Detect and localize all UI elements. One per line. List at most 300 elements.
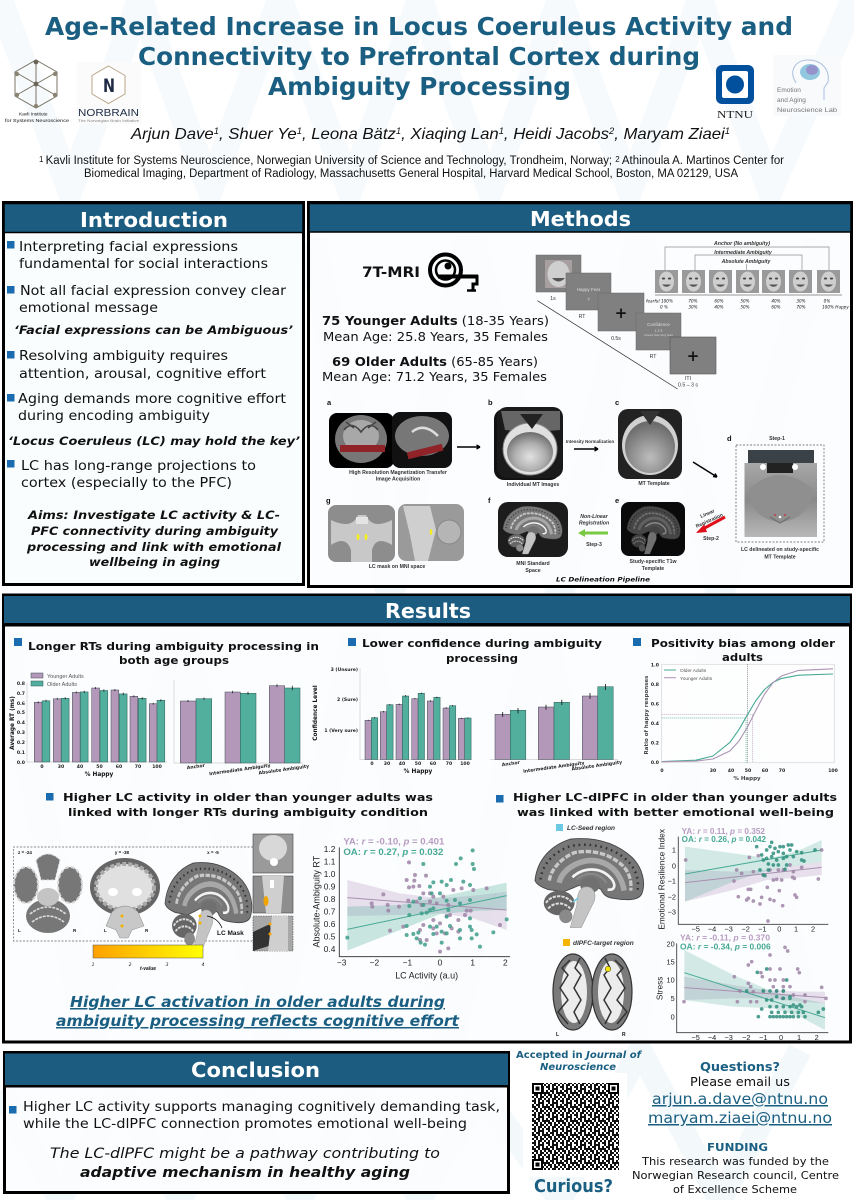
bullet list: introduction points	[7, 240, 301, 491]
authors: , Xiaqing Lan	[401, 126, 499, 143]
task timeline: Happy Fear	[577, 287, 601, 292]
bullet list: introduction points: ‘Facial expressions can be Ambiguous’	[14, 323, 294, 337]
bar chart: average RT by percent happy: 60	[116, 764, 122, 770]
funding block: Norwegian Research council, Centre	[632, 1169, 839, 1182]
ambiguity conditions with face morphs: 70%	[796, 304, 806, 310]
bar chart: confidence by percent happy: 1 (Very sure)	[324, 728, 358, 734]
pipeline step c: MT Template	[638, 481, 670, 487]
bar chart: confidence by percent happy	[313, 667, 472, 775]
bar chart: average RT by percent happy: 0	[40, 764, 44, 770]
takeaway: cognitive effort: Higher LC activation in older adults during	[70, 993, 445, 1011]
subheading: lower confidence: processing	[446, 652, 518, 665]
funding block: This research was funded by the	[641, 1155, 829, 1168]
bar chart: confidence by percent happy: 50	[415, 761, 421, 767]
bullet list: introduction points: Not all facial expression convey clear	[20, 284, 287, 299]
scatter plot: LC-dlPFC vs emotional resilience: −4	[708, 925, 716, 934]
takeaway: cognitive effort: ambiguity processing reflects cognitive effort	[56, 1012, 460, 1030]
line chart: ratio of happy responses: 0.8	[651, 682, 659, 688]
scatter plot: LC-dlPFC vs emotional resilience: 1	[672, 846, 676, 855]
authors: , Heidi Jacobs	[504, 126, 609, 143]
task timeline	[536, 255, 716, 389]
participants: younger and older adults: 69 Older Adults (65-85 Years)	[332, 355, 538, 369]
bar chart: confidence by percent happy: 3 (Unsure)	[331, 667, 358, 673]
colour bar: t-value	[92, 945, 205, 972]
Curious label: Curious?	[534, 1176, 613, 1197]
bullet list: introduction points: Aging demands more cognitive effort	[18, 392, 286, 407]
panel: conclusion	[4, 1052, 508, 1192]
pipeline step d	[727, 434, 824, 560]
conclusion statement: The LC-dlPFC might be a pathway contributing to	[50, 1146, 440, 1162]
task timeline: +	[615, 304, 627, 322]
logo: Emotion and Aging Neuroscience Lab	[773, 55, 841, 116]
scatter plot: LC-dlPFC vs stress: 0	[671, 1012, 675, 1021]
bar chart: average RT by percent happy: 0.7	[17, 691, 25, 697]
arrow: non-linear registration step 3	[578, 514, 609, 548]
pipeline step b: b	[488, 398, 493, 407]
authors: 1	[214, 126, 219, 136]
bullet list: introduction points: fundamental for social interactions	[19, 257, 268, 272]
scatter plot: LC-dlPFC vs stress: −4	[708, 1033, 716, 1042]
pipeline step f: Space	[525, 568, 541, 574]
subheading: lower confidence	[348, 637, 602, 665]
task timeline: ITI	[685, 376, 691, 382]
conclusion statement: adaptive mechanism in healthy aging	[80, 1165, 410, 1181]
line chart: ratio of happy responses: 0.4	[651, 721, 659, 727]
scatter plot: LC-dlPFC vs stress: OA: r = -0.34, p = 0.006	[680, 941, 771, 951]
bar chart: average RT by ambiguity: Intermediate Ambiguity	[209, 763, 271, 777]
subheading: LC-dlPFC: was linked with better emotional well-being	[517, 806, 834, 819]
pipeline step d: d	[727, 434, 732, 443]
panel: methods	[308, 202, 852, 586]
bar chart: average RT by percent happy: 0.4	[17, 720, 25, 726]
participants: younger and older adults: 75 Younger Adults (18-35 Years)	[322, 314, 549, 328]
scatter plot: LC-dlPFC vs emotional resilience: −3	[724, 925, 733, 934]
pipeline step d: MT Template	[764, 554, 796, 560]
pipeline step g	[326, 496, 464, 570]
scatter plot: LC-dlPFC vs stress: −5	[691, 1033, 700, 1042]
line chart: ratio of happy responses: 100	[828, 768, 838, 774]
subheading: positivity bias: adults	[722, 651, 763, 664]
scatter plot: LC activity vs RT: 0.9	[324, 881, 336, 891]
scatter plot: LC activity vs RT: 0.7	[324, 906, 336, 916]
scatter plot: LC activity vs RT: 1.0	[324, 869, 336, 879]
scatter plot: LC activity vs RT: −1	[403, 958, 412, 968]
funding block	[632, 1142, 839, 1196]
scatter plot: LC-dlPFC vs stress: 15	[667, 958, 675, 967]
scatter plot: LC-dlPFC vs stress: −3	[724, 1033, 733, 1042]
subheading: lower confidence: Lower confidence during ambiguity	[362, 637, 602, 650]
participants: younger and older adults	[322, 314, 549, 384]
scatter plot: LC-dlPFC vs stress	[654, 933, 828, 1042]
scatter plot: LC-dlPFC vs emotional resilience: 2	[811, 925, 815, 934]
icon: MRI scanner	[430, 254, 478, 290]
bar chart: average RT by percent happy: 30	[58, 764, 64, 770]
ambiguity conditions with face morphs: 0%	[824, 298, 830, 304]
authors: 1	[725, 126, 730, 136]
accepted in Journal of Neuroscience: Neuroscience	[540, 1062, 617, 1073]
accepted in Journal of Neuroscience: Accepted in Journal of	[516, 1050, 643, 1061]
bar chart: average RT by percent happy	[10, 673, 167, 778]
colour bar: t-value: 4	[202, 962, 205, 968]
aims	[26, 508, 282, 569]
pipeline step c	[615, 398, 682, 487]
conclusion text: while the LC-dlPFC connection promotes emotional well-being	[23, 1117, 467, 1132]
pipeline step b: Individual MT Images	[507, 482, 559, 488]
line chart: ratio of happy responses: 1.0	[651, 662, 659, 668]
ambiguity conditions with face morphs	[646, 241, 849, 310]
task timeline: ?	[587, 297, 590, 302]
scatter plot: LC-dlPFC vs emotional resilience: −5	[691, 925, 700, 934]
scatter plot: LC activity vs RT: 0.8	[324, 894, 336, 904]
heading: Introduction	[4, 204, 303, 232]
ambiguity conditions with face morphs: 50%	[740, 304, 750, 310]
panel: results	[4, 595, 850, 1042]
pipeline step f: f	[488, 496, 491, 505]
scatter plot: LC-dlPFC vs emotional resilience: −1	[668, 877, 676, 886]
brain activation maps: z = -24	[18, 850, 32, 855]
bar chart: average RT by percent happy: 0.8	[17, 681, 25, 687]
aims: processing and link with emotional	[26, 540, 282, 554]
scatter plot: LC-dlPFC vs emotional resilience: YA: r = 0.11, p = 0.352	[682, 826, 765, 836]
brain activation maps: R	[73, 928, 77, 933]
affiliations: Biomedical Imaging, Department of Radiology, Massachusetts General Hospital, Harvard Medical School, Boston, MA 02129, USA	[84, 168, 738, 180]
ambiguity conditions with face morphs: Anchor (No ambiguity)	[713, 241, 770, 247]
scatter plot: LC-dlPFC vs emotional resilience: −3	[668, 907, 676, 916]
ambiguity conditions with face morphs: 40%	[714, 304, 724, 310]
bar chart: confidence by percent happy: 0	[370, 761, 374, 767]
logo: Norbrain	[77, 62, 141, 124]
arrow: linear registration step 2: Linear	[700, 508, 716, 520]
line chart: ratio of happy responses: % Happy	[733, 776, 761, 782]
scatter plot: LC-dlPFC vs emotional resilience: Emotional Resilience Index	[657, 828, 667, 930]
subheading: longer RTs	[14, 638, 319, 667]
bullet list: introduction points: ‘Locus Coeruleus (LC) may hold the key’	[8, 434, 301, 448]
bar chart: average RT by percent happy: 0.3	[17, 730, 25, 736]
line chart: ratio of happy responses: Ratio of happy responses	[644, 675, 650, 754]
bar chart: average RT by percent happy: 0.1	[17, 750, 25, 756]
authors: 2	[608, 126, 614, 136]
scatter plot: LC activity vs RT: 1.2	[324, 844, 336, 854]
line chart: ratio of happy responses: 0.0	[651, 760, 659, 766]
bar chart: confidence by percent happy: 30	[384, 761, 390, 767]
bar chart: average RT by percent happy: 0.0	[17, 760, 25, 766]
QR code	[523, 1073, 627, 1177]
ambiguity conditions with face morphs: 0 %	[660, 304, 668, 310]
scatter plot: LC activity vs RT: −2	[370, 958, 379, 968]
bar chart: confidence by percent happy: 40	[399, 761, 405, 767]
brain activation maps: L	[18, 928, 21, 933]
contact block	[648, 1060, 832, 1127]
line chart: ratio of happy responses: 0	[660, 768, 664, 774]
contact block: maryam.ziaei@ntnu.no	[648, 1109, 832, 1127]
brain activation maps: LC Mask	[217, 930, 244, 937]
scatter plot: LC activity vs RT: LC Activity (a.u)	[395, 970, 458, 980]
pipeline step f: MNI Standard	[516, 561, 550, 567]
scatter plot: LC-dlPFC vs emotional resilience: −1	[758, 925, 767, 934]
subheading: LC activity: linked with longer RTs during ambiguity condition	[68, 806, 428, 819]
scatter plot: LC-dlPFC vs emotional resilience: OA: r = 0.26, p = 0.042	[682, 834, 766, 844]
task timeline: RT	[579, 314, 586, 320]
pipeline step f	[488, 496, 568, 574]
pipeline step a: High Resolution Magnetization Transfer	[349, 470, 447, 476]
task timeline: Confidence	[647, 322, 670, 327]
bar chart: average RT by percent happy: Average RT (ms)	[10, 696, 16, 750]
scatter plot: LC-dlPFC vs emotional resilience	[657, 826, 828, 934]
scatter plot: LC-dlPFC vs stress: 0	[779, 1033, 783, 1042]
heading: Introduction: Introduction	[80, 208, 228, 232]
pipeline step a: Image Acquisition	[376, 476, 420, 482]
line chart: ratio of happy responses: 30	[710, 768, 716, 774]
task timeline: RT	[650, 354, 657, 360]
authors: , Shuer Ye	[219, 126, 297, 143]
scatter plot: LC-dlPFC vs stress: −2	[742, 1033, 751, 1042]
pipeline step b	[488, 398, 563, 488]
ambiguity conditions with face morphs: 30%	[688, 304, 698, 310]
line chart: ratio of happy responses	[644, 662, 838, 782]
bullet list: introduction points: Resolving ambiguity requires	[19, 349, 228, 364]
arrow: linear registration step 2: Step-2	[703, 536, 719, 542]
bar chart: average RT by percent happy: 40	[77, 764, 83, 770]
arrow: a to b	[457, 445, 480, 449]
pipeline step e: Template	[642, 566, 664, 572]
arrow: linear registration step 2	[695, 508, 725, 542]
arrow: non-linear registration step 3: Non-Linear	[580, 514, 609, 520]
scatter plot: LC-dlPFC vs stress: 2	[815, 1033, 819, 1042]
heading: Conclusion	[5, 1054, 508, 1088]
scatter plot: LC activity vs RT: 1	[470, 958, 475, 968]
task timeline: 0.5 – 3 s	[678, 382, 698, 388]
colour bar: t-value: 2	[129, 962, 132, 968]
scatter plot: LC activity vs RT: 1.1	[324, 856, 336, 866]
bullet list: introduction points: during encoding ambiguity	[18, 409, 210, 424]
colour bar: t-value: 3	[166, 962, 169, 968]
scatter plot: LC activity vs RT: Absolute-Ambiguity RT	[312, 855, 322, 948]
logo: Kavli Institute: Kavli Institute	[19, 112, 48, 118]
affiliations: 2	[615, 155, 622, 164]
bar chart: average RT by percent happy: Older Adults	[47, 682, 77, 688]
bullet list: introduction points: emotional message	[19, 301, 158, 316]
arrow: c to d	[693, 462, 717, 477]
scatter plot: LC activity vs RT: 0.5	[324, 931, 336, 941]
logo: NTNU	[716, 65, 754, 121]
scatter plot: LC-dlPFC vs emotional resilience: 1	[794, 925, 798, 934]
logo: Kavli Institute	[5, 60, 69, 124]
bar chart: confidence by ambiguity: Absolute Ambiguity	[571, 759, 623, 773]
logo: Norbrain: N	[103, 75, 115, 97]
ambiguity conditions with face morphs: 60%	[771, 304, 781, 310]
brain: dlPFC target region: dlPFC-target region	[573, 940, 634, 947]
task timeline: 0.5s	[611, 336, 621, 342]
scatter plot: LC-dlPFC vs emotional resilience: 0	[672, 861, 676, 870]
authors: , Leona Bätz	[302, 126, 396, 143]
scatter plot: LC-dlPFC vs stress: Stress	[654, 977, 664, 1000]
arrow: non-linear registration step 3: Registration	[579, 520, 609, 526]
scatter plot: LC activity vs RT: −3	[337, 958, 347, 968]
authors: 1	[297, 126, 302, 136]
title: Ambiguity Processing	[268, 72, 571, 101]
contact block: Questions?	[700, 1060, 780, 1074]
arrow: intensity normalization	[566, 439, 614, 451]
brain activation maps: R	[145, 928, 149, 933]
scatter plot: LC activity vs RT: 0	[438, 958, 443, 968]
scatter plot: LC-dlPFC vs stress: 1	[797, 1033, 801, 1042]
bullet list: introduction points: LC has long-range projections to	[21, 459, 256, 474]
scatter plot: LC-dlPFC vs emotional resilience: −2	[668, 892, 676, 901]
bullet list: introduction points: attention, arousal, cognitive effort	[19, 367, 266, 382]
aims: wellbeing in aging	[89, 555, 220, 569]
arrow: intensity normalization: Intensity Normalization	[566, 439, 614, 444]
bar chart: confidence by ambiguity	[490, 684, 623, 775]
ambiguity conditions with face morphs: Intermediate Ambiguity	[714, 250, 773, 256]
ambiguity conditions with face morphs: 40%	[771, 298, 781, 304]
affiliations: 1	[39, 155, 46, 164]
task timeline: 1 2 3	[655, 329, 662, 333]
aims: Aims: Investigate LC activity & LC-	[27, 508, 280, 522]
brain: dlPFC target region	[553, 939, 634, 1038]
task timeline: +	[687, 347, 699, 365]
bar chart: confidence by percent happy: 60	[430, 761, 436, 767]
line chart: ratio of happy responses: 40	[728, 768, 734, 774]
bar chart: confidence by percent happy: Confidence Level	[313, 685, 319, 741]
pipeline step a: a	[327, 398, 332, 407]
contact block: arjun.a.dave@ntnu.no	[652, 1090, 828, 1108]
bar chart: confidence by percent happy: 100	[460, 761, 470, 767]
scatter plot: LC activity vs RT: 2	[503, 958, 508, 968]
pipeline step d: Step-1	[769, 436, 785, 442]
bar chart: confidence by ambiguity: Anchor	[501, 760, 521, 768]
scatter plot: LC activity vs RT: YA: r = -0.10, p = 0.401	[343, 836, 444, 846]
funding block: of Excellence Scheme	[673, 1183, 797, 1196]
scatter plot: LC activity vs RT	[312, 836, 510, 980]
line chart: ratio of happy responses: 0.2	[651, 740, 659, 746]
colour bar: t-value: 1	[92, 962, 95, 968]
logo: Emotion and Aging Neuroscience Lab: Neuroscience Lab	[777, 107, 837, 114]
bullet list: introduction points: Interpreting facial expressions	[19, 240, 238, 255]
ambiguity conditions with face morphs: Absolute Ambiguity	[721, 259, 772, 265]
subheading: longer RTs: both age groups	[119, 654, 229, 667]
title: Age-Related Increase in Locus Coeruleus Activity and	[45, 12, 793, 41]
scatter plot: LC activity vs RT: 0.4	[324, 944, 336, 954]
subheading: longer RTs: Longer RTs during ambiguity processing in	[28, 640, 319, 653]
brain activation maps: y = -38	[115, 850, 130, 855]
authors: 1	[396, 126, 401, 136]
scatter plot: LC-dlPFC vs emotional resilience: 0	[777, 925, 781, 934]
authors: Arjun Dave	[131, 126, 210, 143]
logo: Norbrain: NORBRAIN	[78, 108, 139, 119]
brain: LC seed region	[535, 824, 644, 928]
conclusion text	[9, 1100, 500, 1132]
bar chart: average RT by percent happy: % Happy	[85, 772, 114, 778]
pipeline step a	[327, 398, 452, 482]
subheading: positivity bias	[633, 637, 836, 664]
pipeline step e: e	[615, 496, 619, 505]
bar chart: average RT by percent happy: 0.2	[17, 740, 25, 746]
heading: Methods	[309, 204, 851, 232]
conclusion text: Higher LC activity supports managing cognitively demanding task,	[23, 1100, 500, 1115]
bar chart: average RT by percent happy: 50	[96, 764, 103, 770]
pipeline step c: c	[615, 398, 619, 407]
conclusion statement	[50, 1146, 440, 1181]
authors: 1	[499, 126, 504, 136]
scatter plot: LC-dlPFC vs stress: YA: r = -0.11, p = 0.370	[680, 933, 770, 943]
ambiguity conditions with face morphs: 100% Happy	[822, 304, 849, 310]
title: Connectivity to Prefrontal Cortex during	[138, 42, 700, 71]
heading: Results: Results	[385, 599, 471, 623]
affiliations	[39, 155, 784, 180]
accepted in Journal of Neuroscience	[516, 1050, 643, 1073]
title	[45, 12, 793, 101]
scatter plot: LC-dlPFC vs emotional resilience: −2	[741, 925, 750, 934]
scatter plot: LC-dlPFC vs stress: 10	[667, 976, 675, 985]
scatter plot: LC-dlPFC vs stress: −1	[759, 1033, 768, 1042]
authors: , Maryam Ziaei	[614, 126, 725, 143]
ambiguity conditions with face morphs: fearful 100%	[646, 298, 673, 304]
caption: LC delineation pipeline: LC Delineation Pipeline	[556, 576, 651, 584]
subheading: LC activity	[46, 791, 434, 819]
ambiguity conditions with face morphs: 50%	[740, 298, 750, 304]
contact block: Please email us	[690, 1075, 790, 1089]
brain: dlPFC target region: R	[622, 1032, 626, 1038]
panel: introduction	[4, 202, 304, 584]
line chart: ratio of happy responses: 0.6	[651, 702, 659, 708]
bar chart: average RT by ambiguity	[174, 680, 310, 777]
affiliations: Kavli Institute for Systems Neuroscience, Norwegian University of Science and Technology, Trondheim, Norway;	[46, 155, 615, 167]
pipeline step d: LC delineated on study-specific	[741, 547, 819, 553]
scatter plot: LC-dlPFC vs stress: 20	[667, 940, 675, 949]
brain: dlPFC target region: L	[556, 1032, 559, 1038]
pipeline step e	[615, 496, 685, 572]
pipeline step e: Study-specific T1w	[630, 559, 677, 565]
bar chart: average RT by percent happy: 100	[152, 764, 162, 770]
subheading: LC-dlPFC: Higher LC-dlPFC in older than younger adults	[513, 791, 838, 804]
pipeline step g: g	[326, 496, 331, 505]
scatter plot: LC activity vs RT: 0.6	[324, 919, 336, 929]
arrow: non-linear registration step 3: Step-3	[586, 542, 602, 548]
line chart: ratio of happy responses: 70	[779, 768, 785, 774]
bar chart: confidence by percent happy: 2 (Sure)	[337, 697, 358, 703]
bullet list: introduction points: cortex (especially to the PFC)	[21, 476, 232, 491]
bar chart: average RT by ambiguity: Absolute Ambiguity	[258, 763, 310, 777]
takeaway: cognitive effort	[56, 993, 460, 1030]
heading: Methods: Methods	[530, 207, 631, 231]
heading: Conclusion: Conclusion	[191, 1058, 320, 1082]
funding block: FUNDING	[707, 1142, 768, 1154]
affiliations: Athinoula A. Martinos Center for	[622, 155, 784, 167]
bar chart: confidence by percent happy: 70	[446, 761, 452, 767]
task timeline: 1s	[550, 296, 556, 302]
scatter plot: LC-dlPFC vs stress: 5	[671, 994, 675, 1003]
scatter plot: LC activity vs RT: OA: r = 0.27, p = 0.032	[343, 847, 443, 857]
line chart: ratio of happy responses: Older Adults	[680, 668, 707, 674]
ambiguity conditions with face morphs: 30%	[796, 298, 806, 304]
bar chart: confidence by percent happy: % Happy	[404, 769, 433, 775]
participants: younger and older adults: Mean Age: 71.2 Years, 35 Females	[322, 370, 547, 384]
logo: Kavli Institute: for Systems Neuroscience	[5, 118, 69, 124]
bar chart: average RT by percent happy: 0.5	[17, 710, 25, 716]
logo: Emotion and Aging Neuroscience Lab: Emotion	[777, 87, 801, 94]
colour bar: t-value: t-value	[140, 966, 156, 972]
bar chart: average RT by percent happy: 70	[135, 764, 141, 770]
logo: NTNU: NTNU	[717, 110, 754, 121]
ambiguity conditions with face morphs: 60%	[714, 298, 724, 304]
line chart: ratio of happy responses: Younger Adults	[680, 676, 713, 682]
heading: Results	[4, 596, 850, 626]
line chart: ratio of happy responses: 50	[745, 768, 751, 774]
brain: LC seed region: LC-Seed region	[567, 825, 615, 832]
subheading: LC activity: Higher LC activity in older than younger adults was	[63, 791, 434, 804]
participants: younger and older adults: Mean Age: 25.8 Years, 35 Females	[323, 330, 548, 344]
arrow: linear registration step 2: Registration	[695, 512, 724, 530]
